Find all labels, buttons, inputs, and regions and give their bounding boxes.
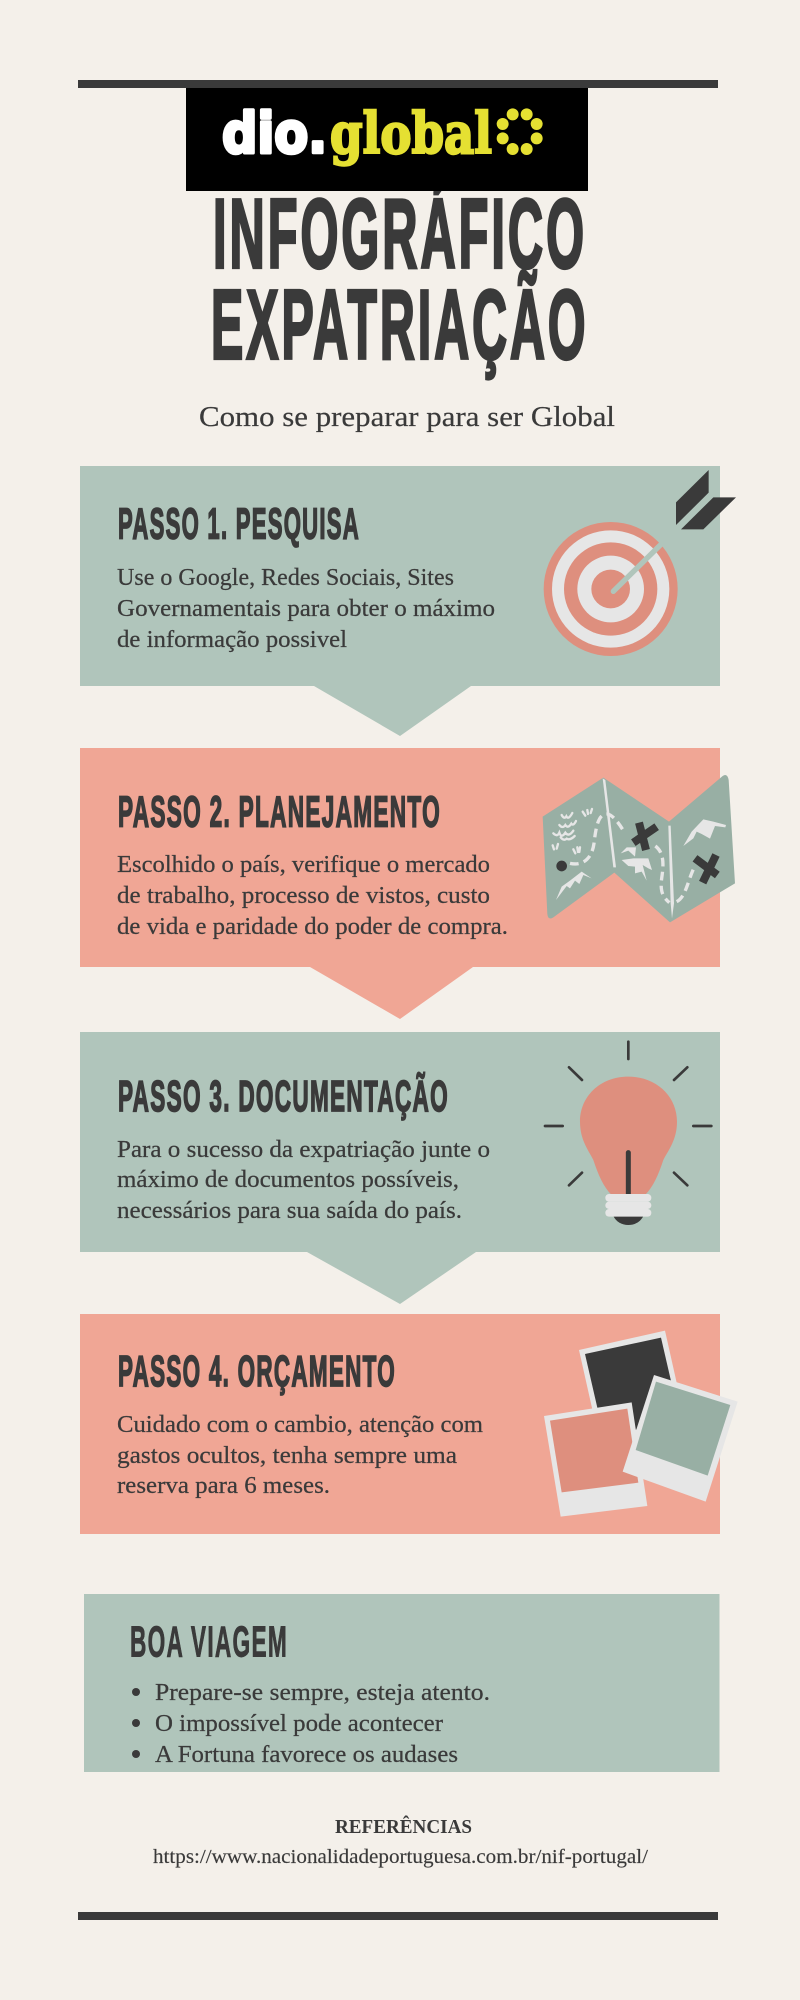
text: passo 2 xyxy=(117,851,508,940)
panel 3 background with pointer xyxy=(80,1032,720,1304)
text: passo 1: Governamentais para obter o máximo xyxy=(117,595,495,622)
logo: dio.global: global xyxy=(330,101,492,167)
panel 5 background xyxy=(84,1594,720,1772)
heading: passo 2: PASSO 2. PLANEJAMENTO xyxy=(118,788,441,836)
panel: passo 2 xyxy=(80,748,735,1019)
text: passo 4 xyxy=(117,1411,483,1499)
panel: passo 1 xyxy=(80,466,736,736)
text: passo 2: Escolhido o país, verifique o mercado xyxy=(117,851,490,878)
panel 1 background with pointer xyxy=(80,466,720,736)
top bar xyxy=(78,80,718,88)
heading: passo 3: PASSO 3. DOCUMENTAÇÃO xyxy=(118,1071,449,1121)
bullet list xyxy=(132,1679,490,1768)
text: passo 1: de informação possivel xyxy=(117,626,347,653)
logo: dio.global xyxy=(186,88,588,191)
panel: passo 3 xyxy=(80,1032,720,1304)
bullet list: Prepare-se sempre, esteja atento. xyxy=(155,1679,490,1706)
icon: light bulb xyxy=(545,1042,711,1225)
text: passo 3: necessários para sua saída do país. xyxy=(117,1197,462,1224)
text: passo 1: Use o Google, Redes Sociais, Sites xyxy=(117,564,454,591)
references: REFERÊNCIAS xyxy=(335,1816,472,1838)
icon: target with arrow xyxy=(544,470,736,656)
panel 2 background with pointer xyxy=(80,748,720,1019)
text: passo 2: de trabalho, processo de vistos, custo xyxy=(117,882,490,909)
text: passo 4: reserva para 6 meses. xyxy=(117,1472,330,1499)
panel: passo 4 xyxy=(80,1314,738,1534)
text: passo 4: Cuidado com o cambio, atenção com xyxy=(117,1411,483,1438)
text: passo 1 xyxy=(117,564,495,653)
panel: boa viagem xyxy=(84,1594,720,1772)
icon: folded map xyxy=(543,775,735,922)
title xyxy=(211,178,588,380)
text: passo 4: gastos ocultos, tenha sempre uma xyxy=(117,1442,457,1469)
bottom bar xyxy=(78,1912,718,1920)
icon: polaroid photos xyxy=(544,1331,738,1517)
text: passo 3 xyxy=(117,1136,490,1224)
text: passo 2: de vida e paridade do poder de compra. xyxy=(117,913,508,940)
logo: dio.global: dio. xyxy=(222,102,327,166)
text: passo 3: máximo de documentos possíveis, xyxy=(117,1166,459,1193)
bullet list: A Fortuna favorece os audases xyxy=(155,1741,458,1768)
references xyxy=(153,1816,648,1868)
text: passo 3: Para o sucesso da expatriação junte o xyxy=(117,1136,490,1163)
bullet list: O impossível pode acontecer xyxy=(155,1710,443,1737)
subtitle: Como se preparar para ser Global xyxy=(199,401,615,433)
heading: boa viagem: BOA VIAGEM xyxy=(130,1618,288,1666)
panel 4 background xyxy=(80,1314,720,1534)
heading: passo 4: PASSO 4. ORÇAMENTO xyxy=(118,1347,396,1396)
heading: passo 1: PASSO 1. PESQUISA xyxy=(118,500,360,548)
references: https://www.nacionalidadeportuguesa.com.br/nif-portugal/ xyxy=(153,1846,648,1868)
